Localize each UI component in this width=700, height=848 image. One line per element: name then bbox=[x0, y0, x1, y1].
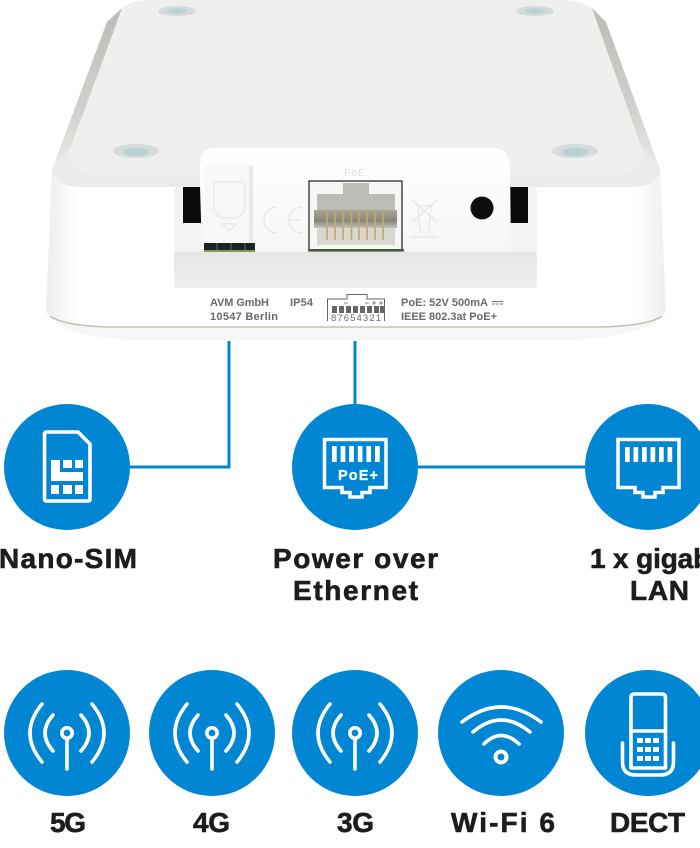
label: 3G: 3G bbox=[337, 807, 374, 838]
connector line: SIM bbox=[130, 341, 229, 467]
waste bin mark bbox=[412, 200, 437, 237]
icon circle: 4G bbox=[149, 670, 275, 796]
3G feature bbox=[292, 670, 418, 838]
screw: back left bbox=[158, 6, 196, 16]
right latch bbox=[510, 187, 528, 223]
left latch bbox=[183, 187, 203, 223]
seam line bbox=[50, 316, 662, 327]
label: protection class: IP54 bbox=[290, 297, 314, 309]
SIM slot contacts bbox=[204, 243, 255, 252]
front bottom edge bbox=[48, 314, 664, 340]
pinout diagram bbox=[328, 294, 384, 324]
icon: LAN port bbox=[618, 440, 679, 497]
side strips bbox=[51, 8, 661, 172]
label: DECT: DECT bbox=[610, 807, 685, 838]
reset hole bbox=[470, 196, 494, 220]
label: 4G: 4G bbox=[193, 807, 230, 838]
icon: 3G antenna bbox=[318, 704, 392, 769]
label: Nano-SIM: Nano-SIM bbox=[0, 543, 137, 574]
Wi-Fi 6 feature bbox=[438, 670, 564, 838]
top plate lip bbox=[52, 150, 661, 187]
icon: 5G antenna bbox=[30, 704, 104, 769]
label: address: 10547 Berlin bbox=[210, 311, 278, 323]
5G feature bbox=[4, 670, 130, 838]
icon circle: LAN bbox=[585, 404, 700, 530]
pinout diagram: 87654321 bbox=[331, 313, 381, 324]
icon circle: 5G bbox=[4, 670, 130, 796]
screw: front right bbox=[552, 144, 598, 158]
DC symbol bbox=[492, 302, 503, 304]
recess floor bbox=[174, 252, 537, 288]
label: Power over: Power over bbox=[273, 543, 438, 574]
connector line: PoE bbox=[354, 341, 356, 405]
ethernet port bbox=[308, 181, 404, 252]
label: IEEE standard: IEEE 802.3at PoE+ bbox=[401, 311, 497, 323]
device body bbox=[46, 168, 666, 340]
label: manufacturer: AVM GmbH bbox=[210, 297, 269, 309]
label: Wi-Fi 6: Wi-Fi 6 bbox=[451, 807, 555, 838]
DECT feature bbox=[585, 670, 700, 838]
gigabit LAN feature bbox=[585, 404, 700, 606]
connector line: PoE to LAN bbox=[418, 466, 585, 468]
label: Ethernet: Ethernet bbox=[293, 575, 418, 606]
screw: front left bbox=[113, 144, 159, 158]
label: PoE rating: PoE: 52V 500mA bbox=[401, 297, 488, 309]
top plate face bbox=[68, 0, 644, 177]
Nano-SIM feature bbox=[0, 404, 137, 574]
4G feature bbox=[149, 670, 275, 838]
icon circle: SIM bbox=[4, 404, 130, 530]
icon: DECT handset bbox=[622, 694, 674, 775]
label: 5G: 5G bbox=[50, 807, 86, 838]
icon circle: DECT bbox=[585, 670, 700, 796]
icon circle: PoE bbox=[292, 404, 418, 530]
icon circle: 3G bbox=[292, 670, 418, 796]
PoE embossed label: PoE bbox=[344, 168, 366, 179]
CE mark bbox=[264, 207, 302, 233]
icon: PoE port: PoE+ bbox=[338, 468, 378, 484]
SIM door bbox=[205, 165, 253, 243]
Power over Ethernet feature bbox=[273, 404, 438, 606]
device photo bbox=[46, 0, 666, 340]
connector recess bbox=[174, 187, 537, 288]
screw: back right bbox=[516, 6, 554, 16]
label: LAN: LAN bbox=[630, 575, 689, 606]
icon: 4G antenna bbox=[175, 704, 249, 769]
icon circle: Wi-Fi bbox=[438, 670, 564, 796]
icon: PoE port bbox=[324, 440, 386, 497]
icon: SIM card bbox=[44, 432, 90, 501]
icon: Wi-Fi waves bbox=[462, 707, 541, 762]
port module bbox=[200, 148, 511, 252]
